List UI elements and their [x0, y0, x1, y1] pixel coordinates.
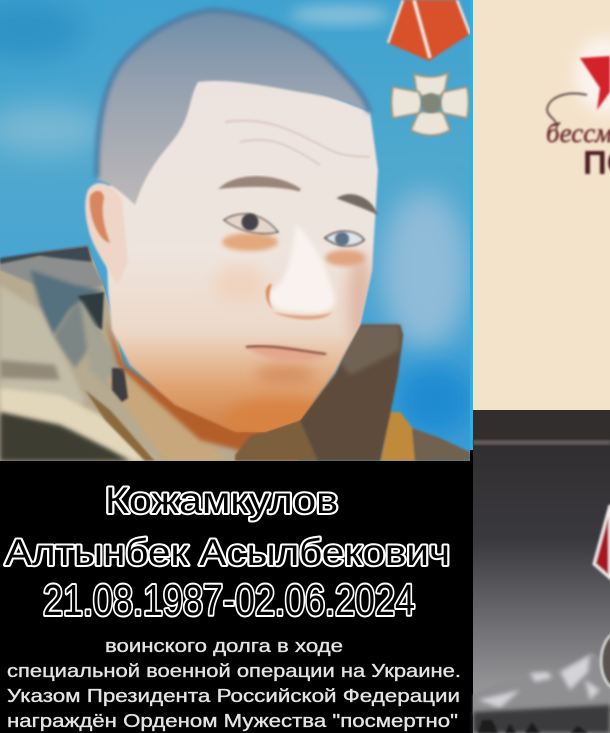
- flourish: [547, 93, 587, 130]
- hair: [97, 10, 370, 205]
- jacket left: [0, 246, 300, 461]
- jacket right and collar: [235, 325, 470, 461]
- citation text: воинского долга в ходе: [105, 636, 343, 656]
- citation text: [7, 636, 461, 731]
- forehead wrinkles: [225, 121, 370, 165]
- divider strip between photo and right panels: [470, 0, 473, 450]
- citation text: награждён Орденом Мужества "посмертно": [7, 711, 458, 731]
- neck backing: [105, 320, 345, 452]
- left eyebrow: [223, 178, 300, 190]
- medal ribbon: [388, 0, 470, 61]
- dark mountain foot: [473, 705, 610, 733]
- citation text: Указом Президента Российской Федерации: [7, 686, 460, 706]
- nose: [266, 225, 335, 320]
- given name and patronymic: Алтынбек Асылбекович: [5, 532, 450, 573]
- panel: dark poster: [470, 410, 610, 733]
- left eye: [222, 214, 278, 251]
- surname: Кожамкулов: [105, 480, 338, 521]
- citation text: специальной военной операции на Украине.: [7, 661, 461, 681]
- panel: beige poster: [473, 0, 610, 410]
- face: [105, 75, 378, 438]
- snowy mountain: [473, 652, 610, 715]
- life dates: 21.08.1987-02.06.2024: [43, 576, 415, 625]
- sky background: [0, 0, 475, 461]
- right eyebrow: [340, 196, 375, 212]
- medal oval: [601, 633, 610, 689]
- hair shading: [97, 10, 370, 178]
- mouth: [246, 345, 330, 362]
- panel: portrait photograph: [0, 0, 475, 461]
- vertical black edge: [470, 450, 473, 733]
- red star fragment: [594, 505, 610, 578]
- ear: [85, 183, 128, 285]
- right eye: [325, 231, 365, 266]
- icon: red star: [575, 37, 610, 113]
- medal cross: [392, 73, 468, 135]
- tree silhouettes: [478, 720, 588, 733]
